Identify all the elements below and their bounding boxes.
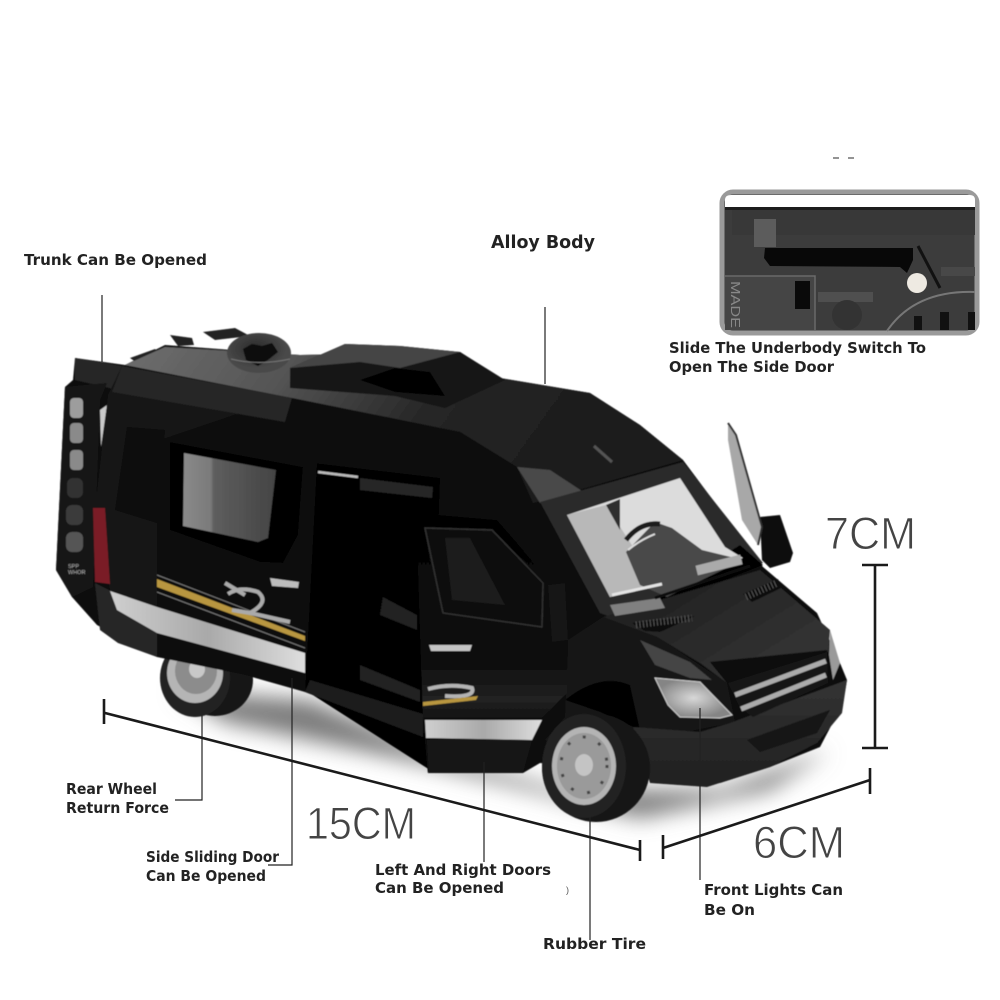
label: underbody switch bbox=[669, 339, 926, 376]
label: front lights bbox=[700, 708, 843, 919]
roof rack knobs bbox=[130, 328, 250, 365]
label: side sliding door: Can Be Opened bbox=[146, 867, 266, 885]
door gold stripe bbox=[423, 696, 478, 706]
door handle bbox=[270, 578, 299, 588]
dimension: width 6CM bbox=[663, 768, 870, 868]
windshield frame bbox=[540, 462, 763, 618]
door swirl logo bbox=[225, 583, 290, 622]
front grille bbox=[728, 652, 828, 717]
roof marker bbox=[594, 446, 612, 462]
label: underbody switch: Open The Side Door bbox=[669, 358, 834, 376]
rear quarter panel bbox=[95, 366, 290, 650]
label: rear wheel: Return Force bbox=[66, 799, 169, 817]
roof surface bbox=[125, 347, 683, 503]
dimension: length 15CM bbox=[104, 699, 640, 861]
label: front lights: Be On bbox=[704, 901, 755, 919]
dimension: width 6CM: 6CM bbox=[753, 817, 845, 868]
floor shadow bbox=[175, 690, 830, 818]
label: front lights: Front Lights Can bbox=[704, 881, 843, 899]
windshield glass bbox=[567, 478, 750, 616]
headlight bbox=[655, 678, 732, 718]
inset: underbody switch photo bbox=[722, 192, 977, 333]
van body silhouette bbox=[56, 345, 847, 783]
bumper mesh bbox=[747, 710, 830, 752]
label: rear wheel: Rear Wheel bbox=[66, 780, 157, 798]
wiper bbox=[655, 566, 750, 598]
sliding side door bbox=[115, 427, 317, 692]
roof air unit bbox=[290, 344, 505, 408]
rear side window bbox=[115, 427, 165, 523]
label: left and right doors: Left And Right Doors bbox=[375, 861, 551, 879]
side door opening interior bbox=[305, 462, 440, 770]
dimension: height 7CM: 7CM bbox=[825, 508, 916, 559]
label: alloy body: Alloy Body bbox=[491, 233, 596, 253]
side roof band bbox=[112, 366, 292, 422]
rear wheel bbox=[160, 639, 253, 717]
cab roof highlight bbox=[517, 467, 585, 503]
toy van bbox=[56, 328, 847, 822]
label: left and right doors: Can Be Opened bbox=[375, 879, 504, 897]
side mirror bbox=[728, 423, 793, 568]
rear bumper corner bbox=[95, 583, 157, 657]
door swirl logo bbox=[428, 686, 472, 696]
dimension: length 15CM: 15CM bbox=[306, 798, 416, 849]
door silver strip bbox=[425, 720, 542, 740]
label: trunk: Trunk Can Be Opened bbox=[24, 251, 207, 269]
stray glyph: ) bbox=[566, 885, 569, 895]
label: side sliding door: Side Sliding Door bbox=[146, 848, 279, 866]
red tail light bbox=[93, 508, 110, 584]
front fender bbox=[545, 617, 735, 770]
rear roof box bbox=[75, 358, 122, 390]
label: rear wheel bbox=[66, 705, 202, 817]
dashboard grid bbox=[695, 555, 743, 575]
hood bbox=[603, 570, 830, 683]
door mirror arm bbox=[548, 583, 568, 642]
ladder small text: WHOR bbox=[68, 570, 85, 576]
dimension: height 7CM bbox=[825, 508, 916, 748]
door handle bbox=[429, 645, 472, 651]
switch knob bbox=[907, 273, 927, 293]
label: left and right doors bbox=[375, 762, 551, 897]
label: side sliding door bbox=[146, 678, 292, 885]
front bumper bbox=[633, 680, 847, 787]
front door window bbox=[425, 528, 543, 627]
front left door (open) bbox=[416, 513, 568, 773]
silver side strip bbox=[110, 591, 305, 673]
cowl vents bbox=[632, 616, 695, 632]
roof dome bbox=[227, 333, 291, 373]
side door window bbox=[170, 442, 303, 563]
gold stripe bbox=[157, 579, 305, 641]
stray ticks bbox=[833, 157, 854, 159]
label: rubber tire: Rubber Tire bbox=[543, 935, 646, 953]
inset text MADE: MADE bbox=[728, 281, 743, 328]
ladder small text: SPP bbox=[68, 564, 79, 570]
rear ladder bbox=[56, 383, 107, 597]
label: underbody switch: Slide The Underbody Switch To bbox=[669, 339, 926, 357]
front wheel bbox=[542, 714, 650, 822]
